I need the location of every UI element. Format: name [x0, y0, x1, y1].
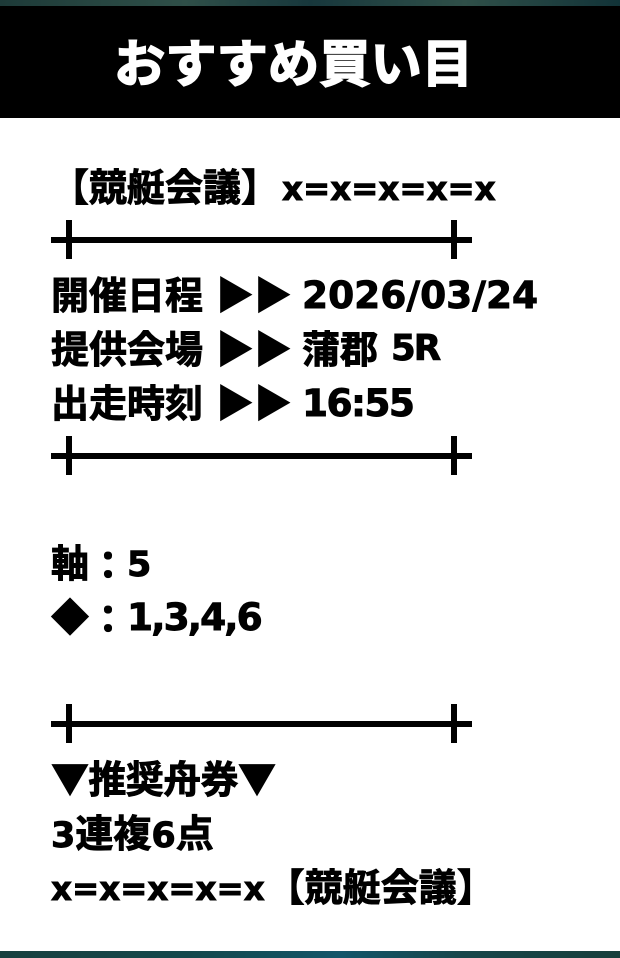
text: start time	[51, 373, 413, 428]
text: footer source line: x=x=x=x=x【競艇会議】	[51, 857, 495, 912]
heading: source line	[51, 157, 496, 212]
heading: source line: x=x=x=x=x	[282, 170, 496, 208]
text: partners: ◆：1,3,4,6	[51, 587, 261, 644]
text: date: 2026/03/24	[302, 273, 538, 317]
text: date	[51, 265, 538, 320]
top background strip	[0, 0, 620, 6]
text: date: ▶▶	[216, 265, 292, 320]
text: venue: ▶▶	[216, 319, 292, 374]
text: venue: 蒲郡	[302, 319, 378, 374]
text: start time: ▶▶	[216, 373, 292, 428]
title banner	[0, 6, 620, 118]
text: recommended ticket heading: ▼推奨舟券▼	[51, 749, 275, 804]
text: date: 開催日程	[51, 265, 203, 320]
text: venue: 提供会場	[51, 319, 203, 374]
divider 2	[51, 436, 472, 475]
text: ticket type: 3連複6点	[51, 803, 214, 858]
text: venue: 5R	[391, 328, 439, 369]
divider 1	[51, 220, 472, 259]
heading: source line: 【競艇会議】	[51, 157, 279, 212]
text: start time: 出走時刻	[51, 373, 203, 428]
title: おすすめ買い目	[114, 22, 473, 97]
text: axis: 軸：5	[51, 533, 151, 590]
text: start time: 16:55	[302, 381, 413, 425]
text: venue	[51, 319, 442, 374]
divider 3	[51, 704, 472, 743]
bottom background strip	[0, 951, 620, 958]
